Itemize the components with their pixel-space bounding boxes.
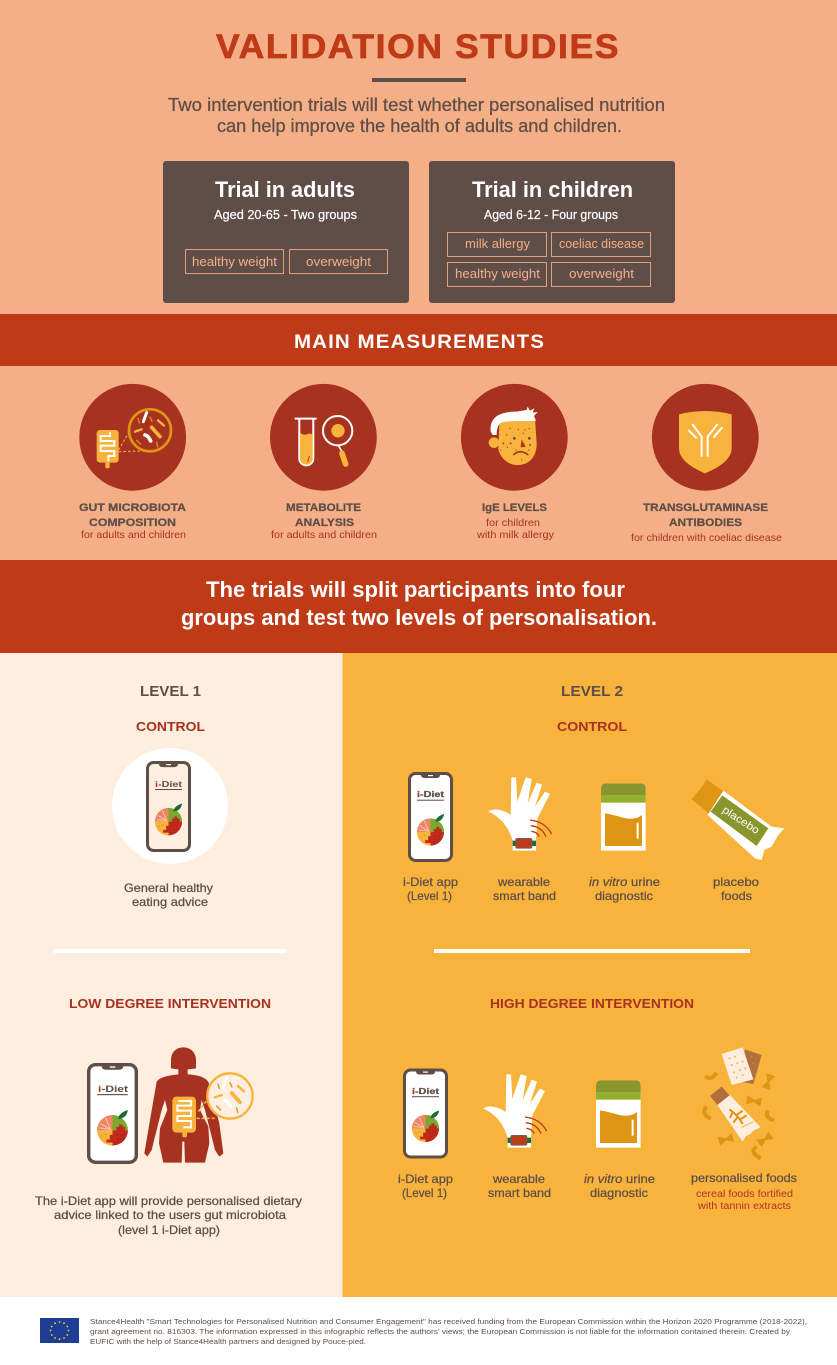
item: urine diagnostic [589, 783, 660, 903]
panel: trial in adults: healthy weight [192, 255, 278, 269]
icon: placebo bar: placebo [720, 804, 762, 837]
panel: level 2 [342, 653, 837, 1297]
label: for adults and children [271, 529, 377, 541]
text: funding statement: Stance4Health "Smart Technologies for Personalised Nutrition and Consumer Engagement" has received funding from the European Commission within the Horizon 2020 Programme (2018-2022), [90, 1317, 807, 1326]
panel: trial in children [429, 161, 675, 303]
measurement: transglutaminase antibodies [631, 384, 782, 544]
item: placebo foods: foods [721, 889, 752, 903]
item: i-Diet app: (Level 1) [402, 1186, 447, 1200]
panel: trial in children: overweight [569, 267, 635, 281]
heading: high degree intervention: HIGH DEGREE INTERVENTION [490, 996, 694, 1011]
panel: trial in adults [163, 161, 409, 303]
item: urine diagnostic: diagnostic [595, 889, 653, 903]
icon: biscuits, bar and pasta [704, 1047, 775, 1158]
panel: trial in children: Trial in children [472, 177, 633, 202]
header panel [0, 0, 837, 314]
icon: i-Diet app: i-Diet [98, 1084, 129, 1095]
text: general advice: eating advice [132, 895, 208, 909]
item: urine diagnostic: diagnostic [590, 1186, 648, 1200]
item: wearable smart band: smart band [493, 889, 556, 903]
label: IgE LEVELS [482, 502, 547, 514]
item: i-Diet app: i-Diet [412, 1086, 439, 1096]
text: funding statement: grant agreement no. 816303. The information expressed in this infographic reflects the authors' views; the European Commission is not liable for the information contained therein. Created by [90, 1327, 790, 1336]
item: wearable smart band [483, 1074, 551, 1200]
item: personalised foods [691, 1047, 797, 1212]
label: METABOLITE [286, 502, 361, 514]
item: placebo foods [692, 779, 784, 903]
label: with milk allergy [476, 529, 555, 541]
text: funding statement [90, 1317, 807, 1346]
banner: four groups statement [0, 560, 837, 653]
icon: face with rash [489, 407, 538, 465]
item: i-Diet app: i-Diet app [398, 1172, 453, 1186]
footer [40, 1317, 807, 1346]
label: ANTIBODIES [669, 517, 742, 529]
measurement: IgE levels [461, 384, 568, 541]
intro text [168, 95, 665, 136]
banner: four groups statement: The trials will split participants into four [206, 577, 625, 602]
text: low degree description: advice linked to the users gut microbiota [54, 1208, 286, 1222]
panel: measurements [0, 366, 837, 560]
text: general advice: General healthy [124, 881, 213, 895]
item: personalised foods: personalised foods [691, 1171, 797, 1185]
text: low degree description: (level 1 i-Diet app) [118, 1223, 220, 1237]
panel: trial in children: coeliac disease [559, 237, 644, 251]
banner: main measurements: MAIN MEASUREMENTS [294, 332, 545, 353]
intro text: can help improve the health of adults and children. [217, 116, 622, 136]
label [631, 502, 782, 544]
title: VALIDATION STUDIES [216, 28, 620, 66]
panel: level 1 [0, 653, 342, 1297]
heading: control: CONTROL [557, 719, 627, 734]
panel: trial in children: milk allergy [465, 237, 531, 251]
label: for children with coeliac disease [631, 532, 782, 544]
icon: body with gut microbiota [144, 1047, 253, 1163]
text: funding statement: EUFIC with the help of Stance4Health partners and designed by Pouce-pied. [90, 1337, 366, 1346]
panel: trial in adults: Aged 20-65 - Two groups [214, 208, 357, 222]
item: urine diagnostic [584, 1080, 655, 1200]
item: i-Diet app [398, 1070, 453, 1200]
heading: control: CONTROL [136, 719, 205, 734]
icon: shield with antibody [679, 411, 732, 473]
icon: i-Diet app on white circle: i-Diet [155, 779, 182, 789]
panel: trial in adults: Trial in adults [215, 177, 355, 202]
panel: trial in adults: overweight [306, 255, 372, 269]
item: urine diagnostic: in vitro urine [589, 875, 660, 889]
item: wearable smart band: smart band [488, 1186, 551, 1200]
intro text: Two intervention trials will test whether personalised nutrition [168, 95, 665, 115]
item: i-Diet app: i-Diet app [403, 875, 458, 889]
icon: EU flag [40, 1318, 79, 1343]
icon: gut and magnifier [97, 409, 171, 468]
label [271, 502, 377, 541]
label [79, 502, 186, 541]
item: wearable smart band: wearable [492, 1172, 545, 1186]
item: i-Diet app: i-Diet [417, 789, 444, 799]
icon: test tube and magnifier [295, 416, 352, 465]
item: personalised foods: with tannin extracts [697, 1200, 791, 1212]
heading: level 2: LEVEL 2 [561, 684, 623, 700]
icon: i-Diet app [89, 1065, 136, 1162]
item: wearable smart band [488, 777, 556, 903]
panel: trial in children: healthy weight [455, 267, 541, 281]
title rule [372, 78, 466, 82]
item: placebo foods: placebo [713, 875, 759, 889]
text: low degree description: The i-Diet app will provide personalised dietary [35, 1194, 302, 1208]
item: i-Diet app: (Level 1) [407, 889, 452, 903]
item: i-Diet app [403, 774, 458, 903]
measurement: metabolite analysis [270, 384, 377, 541]
label [476, 502, 555, 541]
item: urine diagnostic: in vitro urine [584, 1172, 655, 1186]
heading: low degree intervention: LOW DEGREE INTERVENTION [69, 996, 271, 1011]
label: TRANSGLUTAMINASE [643, 502, 768, 514]
item: wearable smart band: wearable [497, 875, 550, 889]
label: for children [486, 517, 540, 529]
label: for adults and children [81, 529, 186, 541]
banner: main measurements [0, 314, 837, 366]
measurement: gut microbiota [79, 384, 186, 541]
panel: trial in children: Aged 6-12 - Four groups [484, 208, 618, 222]
text: low degree description [35, 1194, 302, 1237]
label: COMPOSITION [89, 517, 176, 529]
label: GUT MICROBIOTA [79, 502, 186, 514]
label: ANALYSIS [295, 517, 354, 529]
banner: four groups statement: groups and test two levels of personalisation. [181, 605, 657, 630]
item: personalised foods: cereal foods fortified [696, 1188, 793, 1200]
text: general advice [124, 881, 213, 909]
icon: i-Diet app on white circle [112, 748, 228, 864]
heading: level 1: LEVEL 1 [140, 684, 201, 700]
